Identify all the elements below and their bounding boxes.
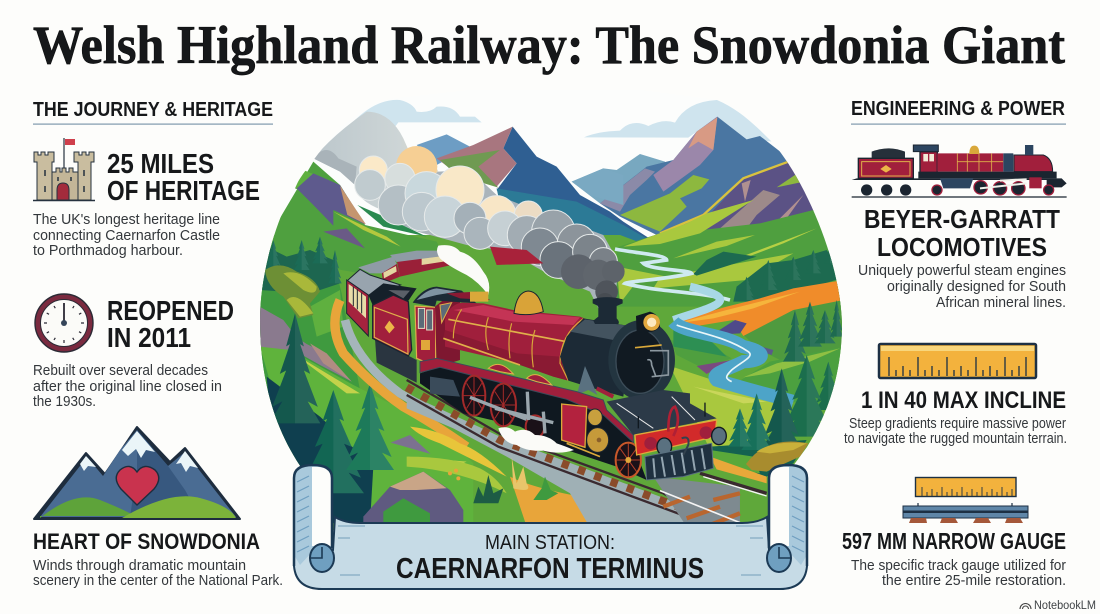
- central illustration: steam train in mountain valley: [255, 85, 855, 535]
- headlamp: [636, 312, 660, 333]
- boiler: [443, 302, 586, 381]
- scroll body: [294, 517, 807, 589]
- upper-right meadows and forest: [617, 200, 843, 307]
- text: locomotive description: originally designed for South: [887, 279, 1066, 295]
- icon: incline ruler: [879, 344, 1036, 378]
- banner: main station: [294, 465, 807, 589]
- heading: engineering and power: ENGINEERING & POWER: [851, 97, 1065, 120]
- cylinder: [562, 404, 609, 452]
- stat: heart of snowdonia: HEART OF SNOWDONIA: [33, 529, 260, 554]
- stat: beyer-garratt locomotives: [864, 204, 1060, 262]
- text: reopening description: [33, 363, 222, 410]
- valley floor: [255, 235, 845, 535]
- watermark: NotebookLM: NotebookLM: [1034, 600, 1096, 612]
- text: locomotive description: African mineral lines.: [936, 295, 1066, 311]
- foreground rock: [363, 472, 463, 527]
- first coach: [347, 269, 401, 336]
- sand boxes: [470, 292, 488, 302]
- far coach: [490, 247, 543, 265]
- white steam puff: [437, 245, 489, 295]
- dome: [514, 291, 543, 315]
- banner station name: CAERNARFON TERMINUS: [396, 553, 704, 585]
- text: heritage description: to Porthmadog harbour.: [33, 243, 183, 259]
- orange path and light ballast: [335, 300, 467, 447]
- buffer beam: [635, 407, 726, 455]
- text: gauge description: [851, 558, 1066, 589]
- front deck: [607, 390, 717, 435]
- rods: [470, 392, 553, 433]
- text: snowdonia description: Winds through dramatic mountain: [33, 558, 246, 574]
- banner label: MAIN STATION:: [485, 532, 615, 554]
- cowcatcher: [645, 437, 713, 480]
- text: heritage description: connecting Caernarfon Castle: [33, 228, 220, 244]
- bush: [265, 265, 320, 318]
- icon: mountains with heart: [34, 427, 240, 519]
- smokebox: [560, 318, 675, 400]
- driving wheels: [463, 376, 544, 438]
- locomotive: [420, 291, 726, 480]
- text: gauge description: The specific track gauge utilized for: [851, 558, 1066, 574]
- lower right landscape: [670, 280, 843, 483]
- upper river: [615, 249, 730, 300]
- text: gauge description: the entire 25-mile restoration.: [882, 573, 1066, 589]
- text: reopening description: Rebuilt over several decades: [33, 363, 208, 379]
- stat: reopened in 2011: IN 2011: [107, 322, 191, 353]
- low steam: [498, 427, 574, 453]
- text: reopening description: the 1930s.: [33, 394, 96, 410]
- panel: engineering and power: [842, 97, 1067, 589]
- stat: beyer-garratt locomotives: BEYER-GARRATT: [864, 204, 1060, 234]
- stat: beyer-garratt locomotives: LOCOMOTIVES: [877, 232, 1047, 262]
- upper-right mountains: [572, 117, 818, 245]
- stat: 1 in 40 max incline: 1 IN 40 MAX INCLINE: [861, 387, 1066, 414]
- stat: reopened in 2011: [107, 295, 234, 353]
- bogie parts: [430, 377, 460, 397]
- text: incline description: Steep gradients require massive power: [849, 416, 1066, 432]
- coaches: [347, 247, 543, 383]
- front wheel: [616, 443, 641, 477]
- upper-left mountains: [416, 126, 648, 241]
- text: snowdonia description: [33, 558, 283, 589]
- text: heritage description: The UK's longest heritage line: [33, 212, 220, 228]
- icon: locomotive side view: [852, 145, 1067, 197]
- text: snowdonia description: scenery in the center of the National Park.: [33, 573, 283, 589]
- splashers: [488, 364, 552, 385]
- text: incline description: [844, 416, 1067, 447]
- foreground track, ballast and meadow: [407, 380, 767, 533]
- icon: clock: [35, 294, 93, 352]
- text: heritage description: [33, 212, 220, 259]
- chimney: [593, 297, 623, 324]
- icon: track gauge: [903, 478, 1028, 523]
- icon: castle: [33, 138, 95, 200]
- tender: [368, 283, 417, 383]
- text: locomotive description: [858, 263, 1066, 311]
- lower river: [673, 287, 793, 402]
- heading: journey and heritage: THE JOURNEY & HERITAGE: [33, 98, 273, 121]
- scroll right roll: [736, 465, 807, 575]
- chassis: [420, 367, 647, 480]
- panel: the journey and heritage: [33, 98, 283, 589]
- text: locomotive description: Uniquely powerful steam engines: [858, 263, 1066, 279]
- running plate: [420, 358, 633, 442]
- smoke plume: [313, 112, 625, 310]
- stat: 25 miles of heritage: 25 MILES: [107, 148, 214, 179]
- text: reopening description: after the original line closed in: [33, 379, 222, 395]
- stat: 25 miles of heritage: OF HERITAGE: [107, 175, 260, 206]
- clouds: [353, 100, 773, 142]
- scroll left roll: [294, 465, 365, 575]
- second coach: [358, 257, 400, 281]
- cab: [413, 287, 490, 367]
- lower-left hillside, rocks and firs: [257, 237, 473, 527]
- text: incline description: to navigate the rugged mountain terrain.: [844, 431, 1067, 447]
- upper-left hillside: [257, 162, 443, 275]
- stat: reopened in 2011: REOPENED: [107, 295, 234, 326]
- third coach: [390, 251, 452, 277]
- stat: 25 miles of heritage: [107, 148, 260, 206]
